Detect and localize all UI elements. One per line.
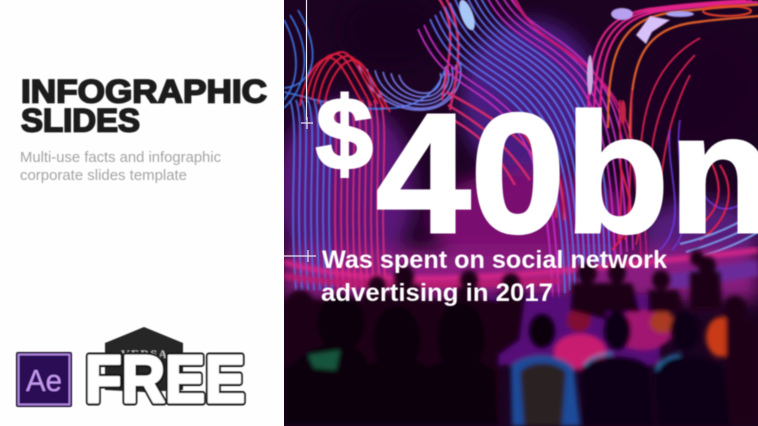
hoodie person [511,313,580,426]
back row [284,250,758,426]
light streaks at top right [456,0,751,124]
subtitle: corporate slides template [20,168,187,184]
light lines [284,0,758,304]
stage floor band [284,250,758,285]
subtitle [20,150,221,184]
icon: after effects logo: Ae [26,363,62,398]
panel: event photo [275,0,758,426]
audience silhouettes [284,250,758,426]
crowd colour patches [490,295,736,370]
title [21,74,267,138]
front row [284,295,497,426]
big stat: $40bn: $ [316,77,373,191]
FREE label: FREE [85,342,245,417]
big stat: $40bn [314,90,758,236]
panel: left white background [0,0,284,426]
icon: versa hexagon badge: VERSA [121,347,167,361]
colour glow background [275,0,758,300]
subtitle: Multi-use facts and infographic [20,150,221,166]
stat caption [321,246,667,307]
title: SLIDES [21,102,140,138]
icon: versa hexagon badge [105,327,183,392]
icon: after effects logo [16,352,72,407]
central band of lines [430,0,610,294]
right orange corner lines [588,0,758,126]
guide lines with crosshairs [284,0,316,262]
title: INFOGRAPHIC [21,74,267,110]
swirl rings around dark centre [359,61,461,110]
FREE label: FREE [85,342,245,417]
stat caption: advertising in 2017 [321,279,553,307]
right persons [581,311,730,426]
stat caption: Was spent on social network [322,246,667,274]
